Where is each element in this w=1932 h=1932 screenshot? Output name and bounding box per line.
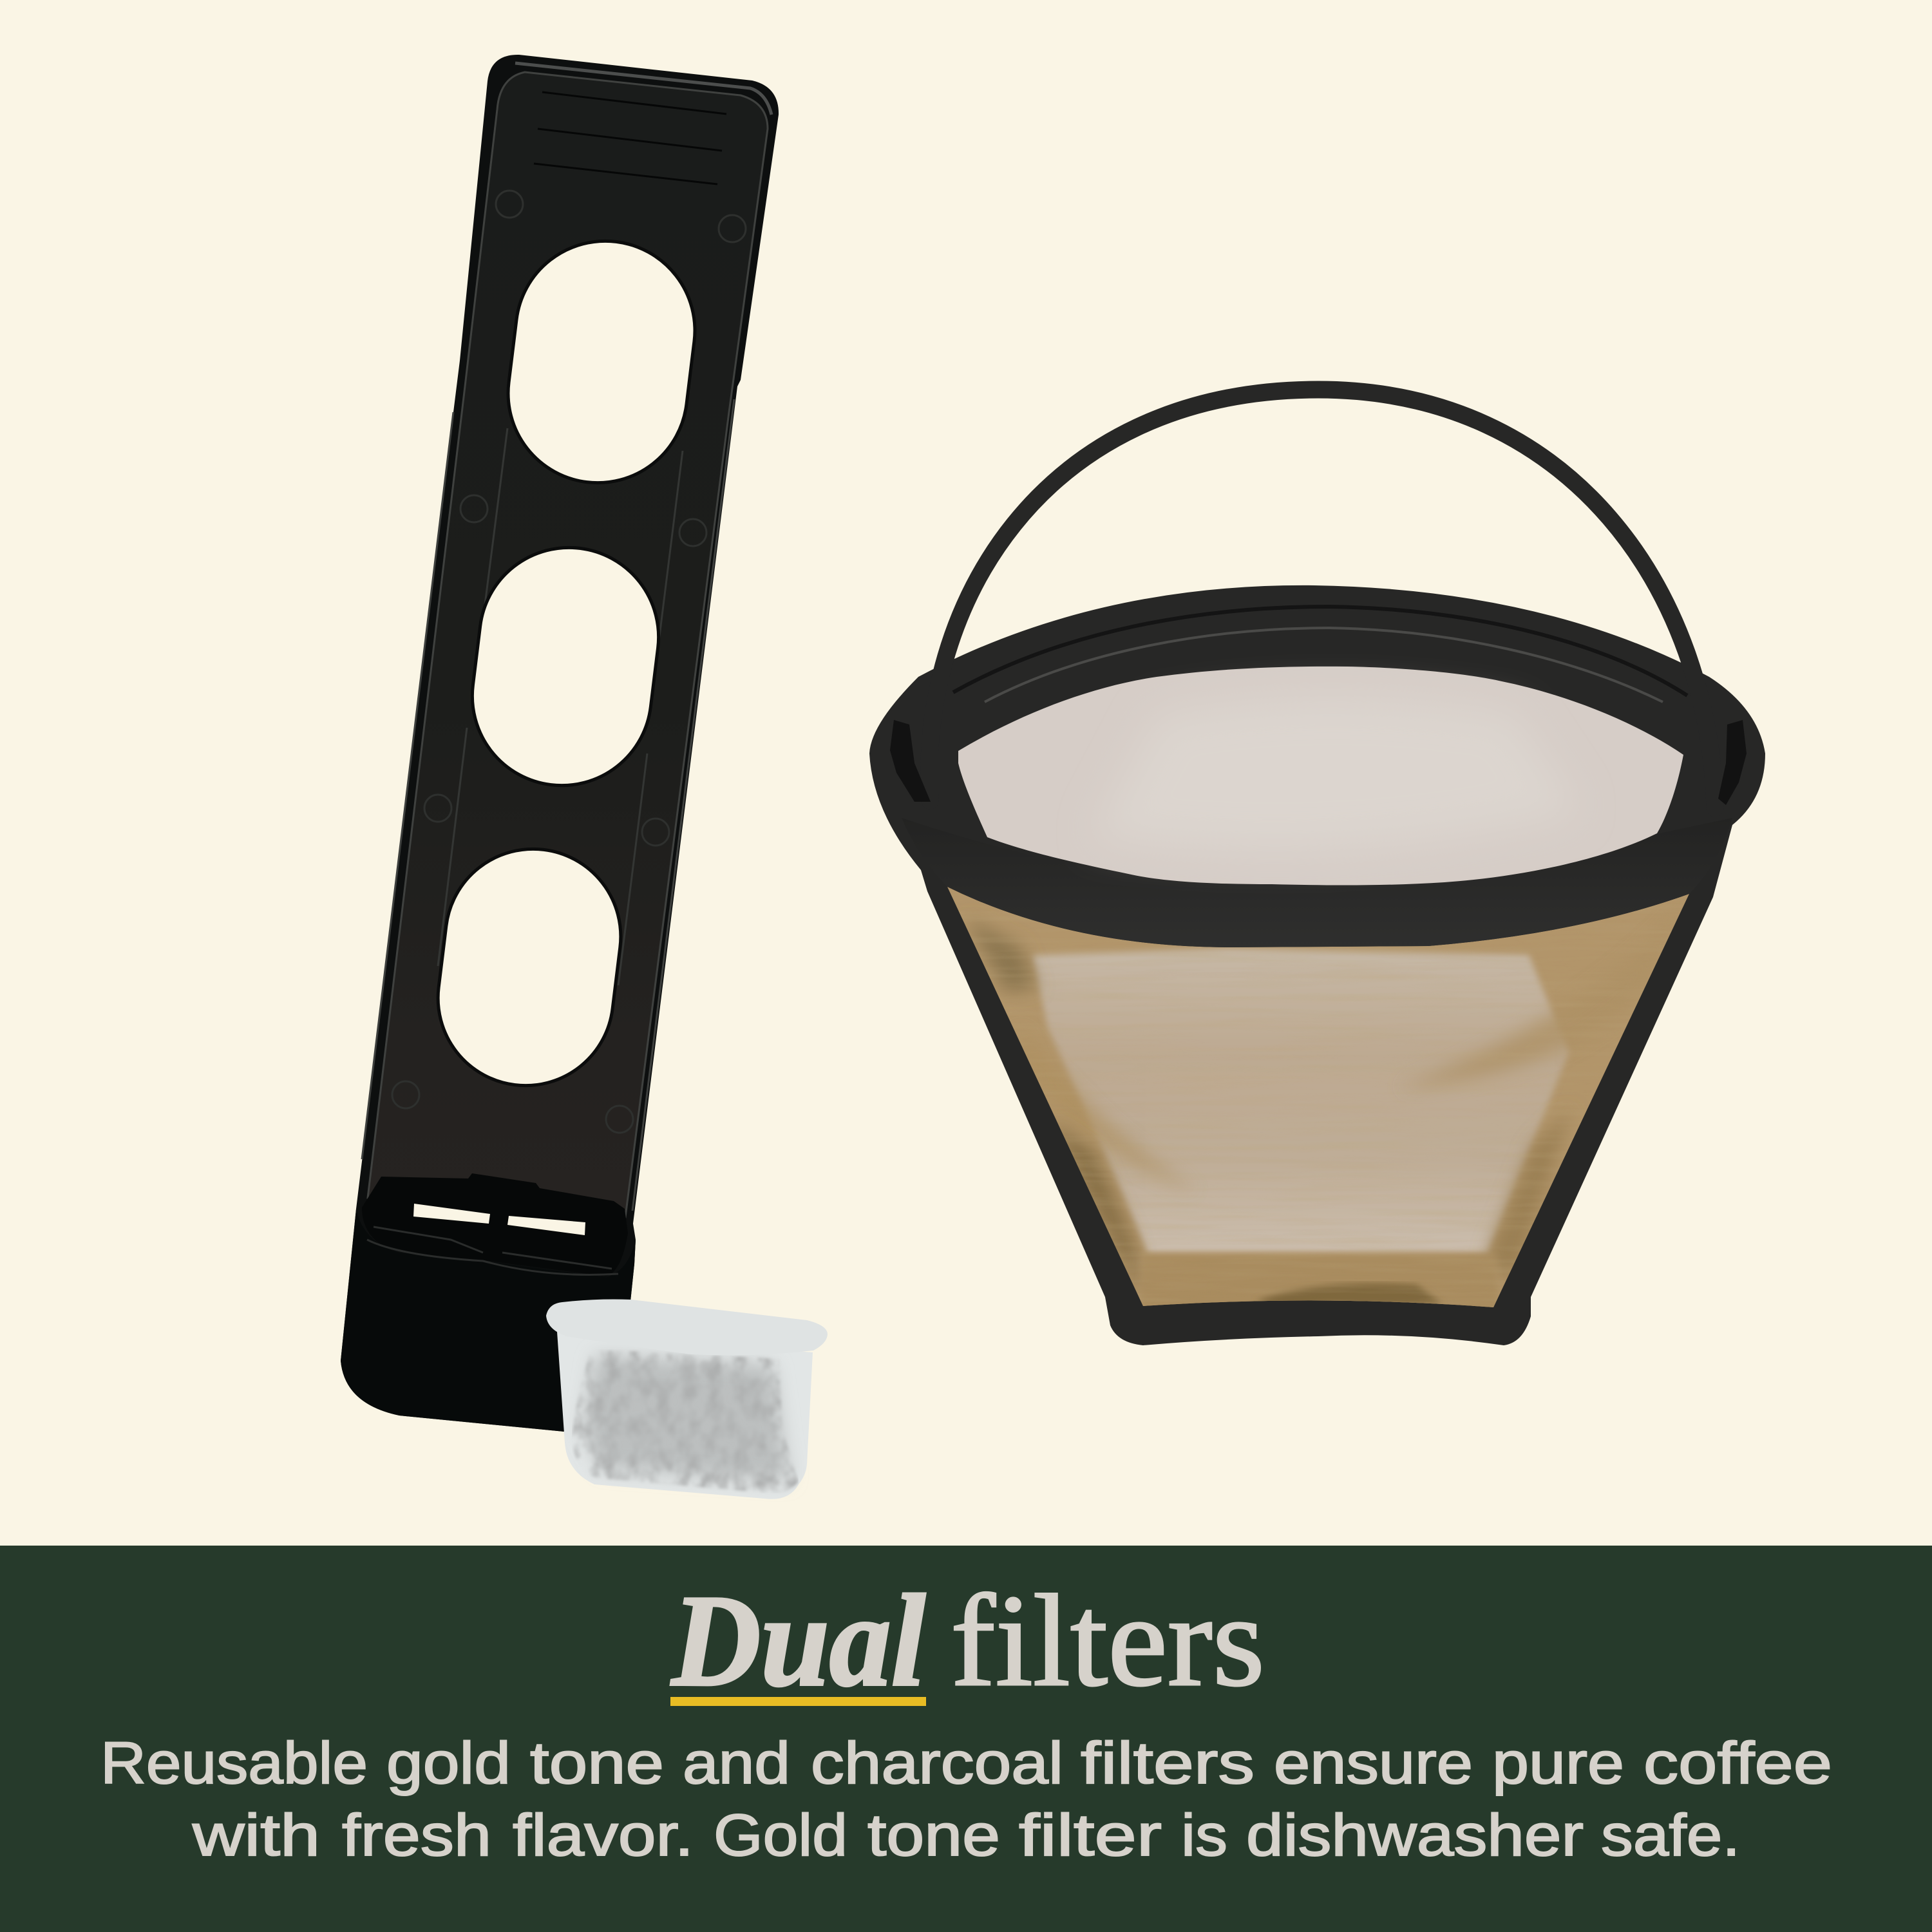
paddle hole 1	[498, 231, 705, 493]
mesh highlight	[1095, 699, 1578, 849]
heading	[670, 1568, 1265, 1714]
right sweep	[1414, 926, 1674, 1090]
paddle black collar	[362, 1173, 628, 1276]
paddle moulded dots	[392, 191, 746, 1133]
paddle slots	[413, 1204, 585, 1235]
lighter central fold	[1032, 949, 1569, 1253]
body line 1: coffee	[1643, 1730, 1832, 1796]
paddle ridges	[362, 92, 734, 1211]
left upper shadow	[966, 918, 1037, 992]
left lower shadow	[1059, 1124, 1145, 1289]
right lower shadow	[1488, 1108, 1571, 1288]
body line 2: safe.	[1601, 1803, 1740, 1868]
charcoal mottling	[572, 1349, 799, 1493]
product: charcoal water filter	[546, 1300, 828, 1499]
body line 2	[192, 1803, 1740, 1868]
inner rim ridge	[985, 628, 1663, 702]
inner rim groove	[953, 607, 1687, 696]
body line 1: ensure	[1274, 1730, 1473, 1796]
body line 2: is	[1181, 1803, 1227, 1868]
bottom dark patch	[1256, 1283, 1443, 1307]
heading underline	[670, 1697, 926, 1706]
gold mesh	[947, 887, 1689, 1307]
handle	[929, 390, 1715, 808]
left sweep	[1021, 1045, 1184, 1189]
paddle basket	[341, 1209, 636, 1433]
upper silver mesh	[958, 667, 1683, 886]
panel background	[0, 1546, 1932, 1932]
bottom band	[1140, 1255, 1501, 1314]
body line 1: filters	[1081, 1730, 1255, 1796]
paddle hole 2	[462, 537, 669, 796]
body line 2: filter	[1019, 1803, 1162, 1868]
paddle body	[341, 55, 779, 1433]
product: black filter paddle	[341, 55, 779, 1433]
right hinge	[1718, 720, 1747, 805]
body line 2: with	[192, 1803, 320, 1868]
body line 2: Gold	[714, 1803, 848, 1868]
gold mesh shading	[934, 882, 1707, 1333]
caption panel	[0, 1546, 1932, 1932]
product: gold tone cone filter	[869, 390, 1765, 1345]
paddle hole 3	[428, 839, 630, 1095]
paddle top highlight	[515, 63, 772, 115]
body line 2: flavor.	[513, 1803, 694, 1868]
paddle collar ridges	[367, 1227, 618, 1274]
body text	[100, 1730, 1832, 1868]
charcoal grey underlay	[583, 1356, 789, 1481]
heading word: filters: filters	[951, 1568, 1265, 1714]
body line 1: pure	[1492, 1730, 1624, 1796]
body line 1: gold	[386, 1730, 511, 1796]
body line 2: dishwasher	[1246, 1803, 1584, 1868]
rim front band	[902, 818, 1732, 947]
woven grain	[934, 882, 1707, 1333]
charcoal lip	[546, 1300, 828, 1356]
body line 1: Reusable	[100, 1730, 368, 1796]
paddle inner panel	[368, 72, 768, 1217]
body line 1: charcoal	[811, 1730, 1063, 1796]
body line 1	[100, 1730, 1832, 1796]
left hinge	[890, 720, 931, 802]
heading word: Dual: Dual	[670, 1568, 925, 1714]
charcoal body	[557, 1332, 813, 1499]
body line 1: tone	[530, 1730, 664, 1796]
body line 2: tone	[867, 1803, 1000, 1868]
body line 1: and	[683, 1730, 790, 1796]
body line 2: fresh	[342, 1803, 491, 1868]
cone frame and rim	[869, 585, 1765, 1345]
